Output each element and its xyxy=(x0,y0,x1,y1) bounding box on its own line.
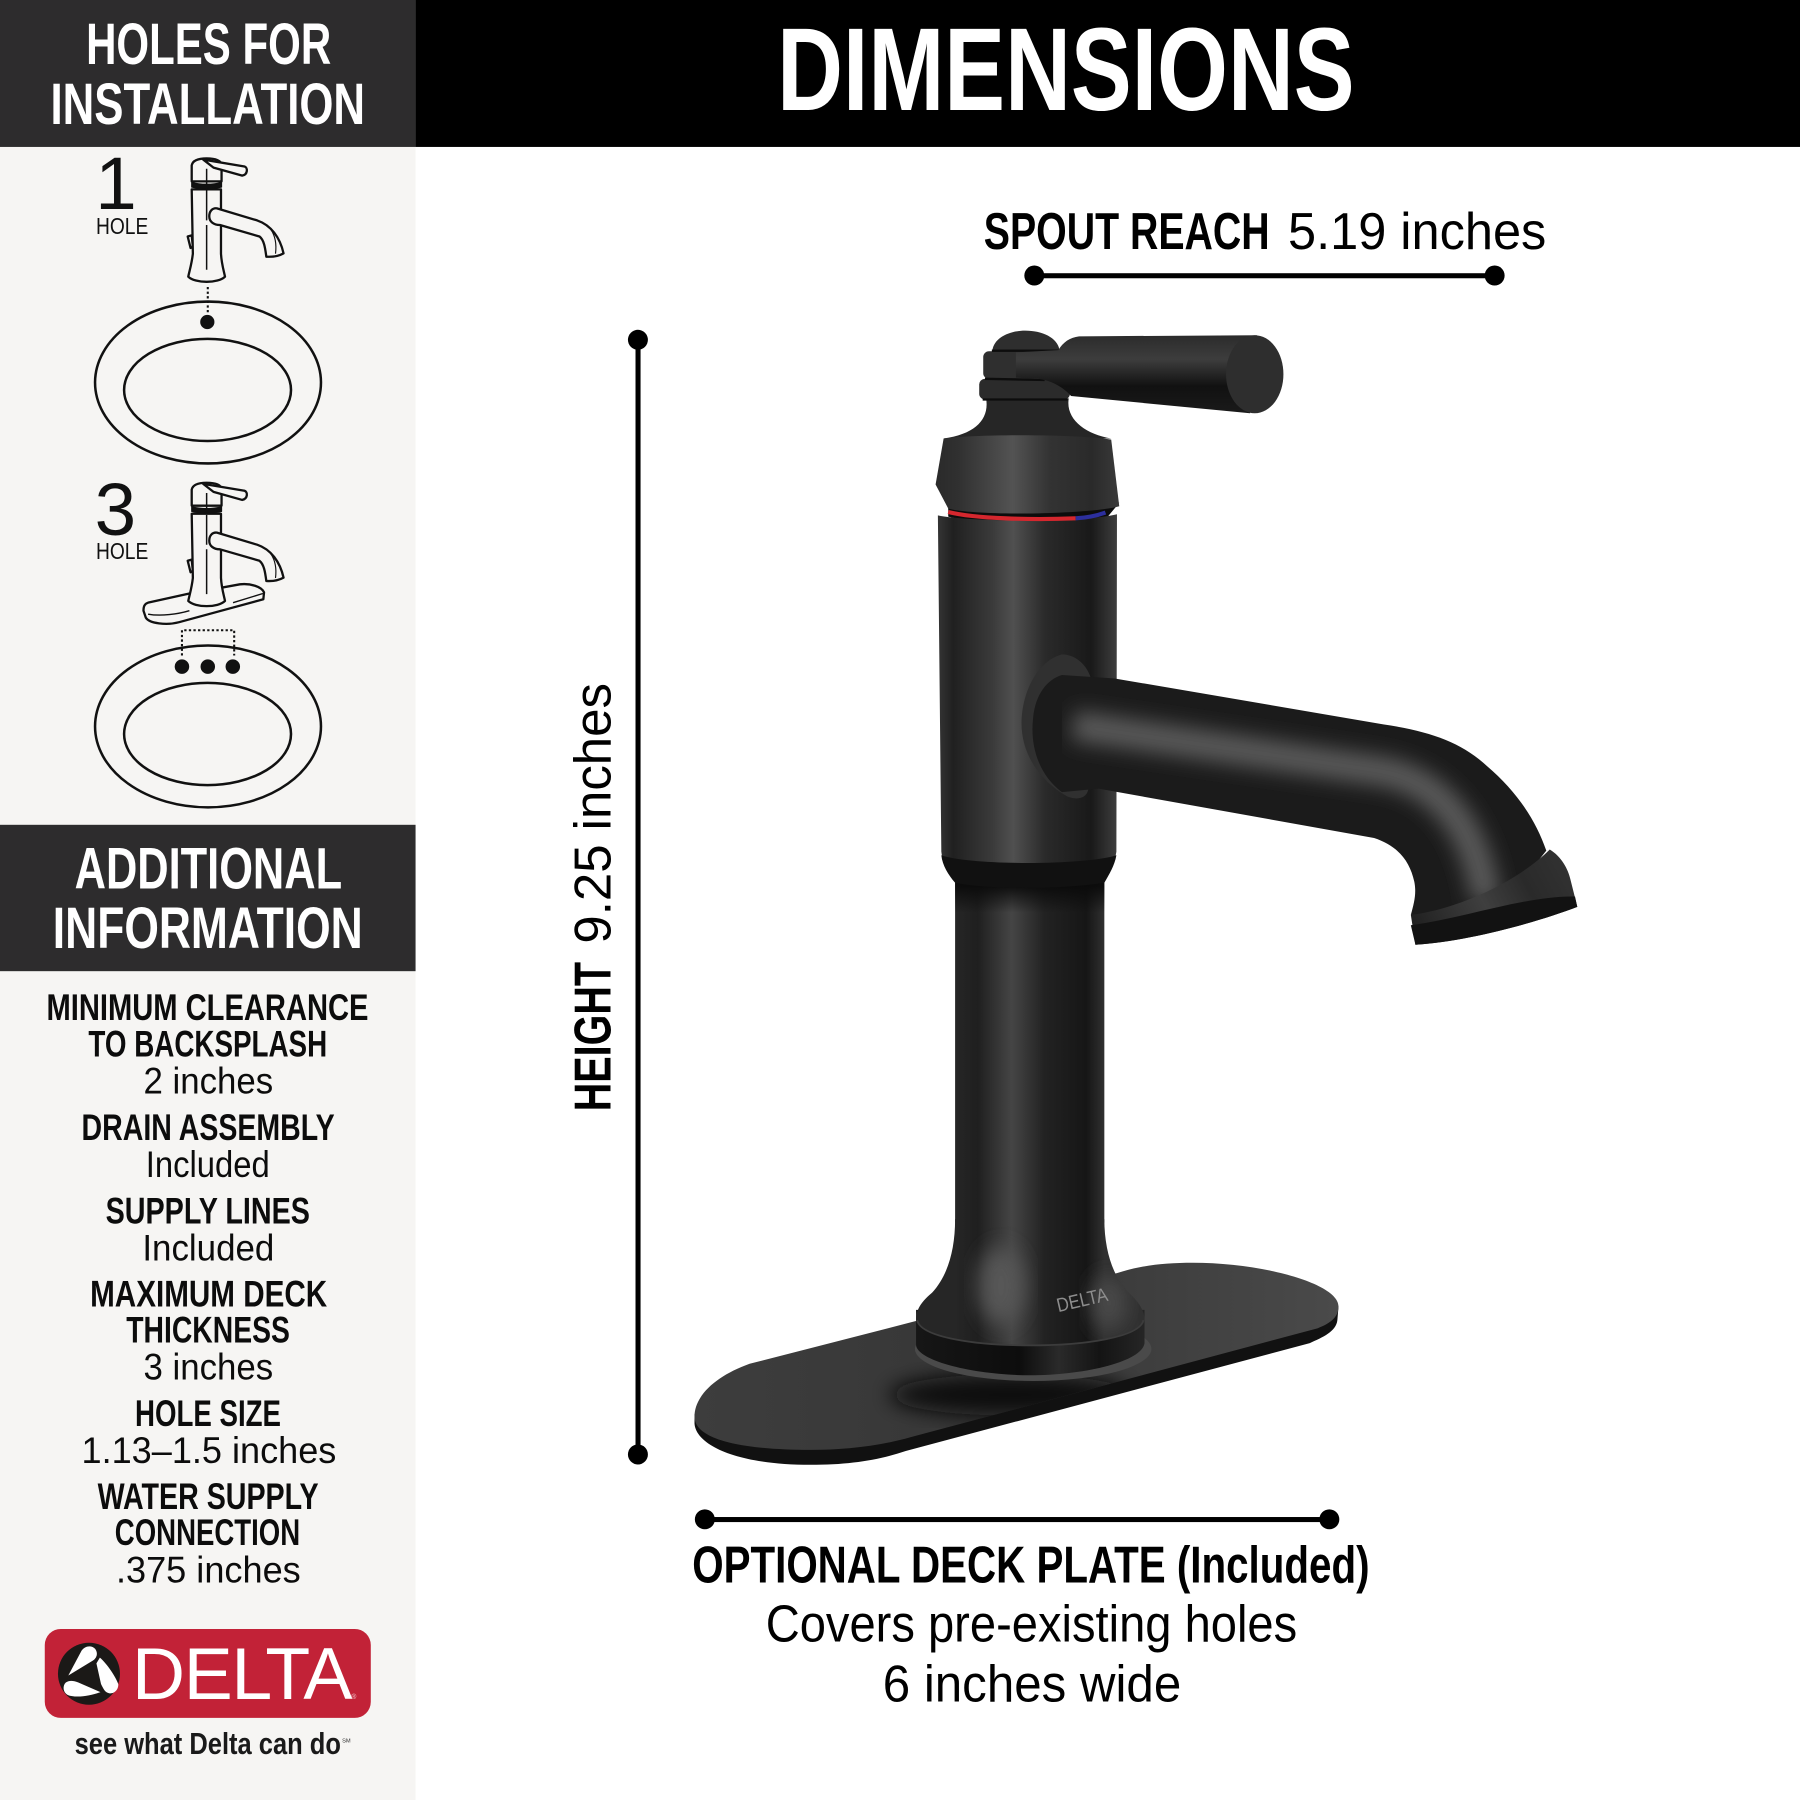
icon: delta emblem xyxy=(58,1643,120,1705)
callout: optional deck plate xyxy=(692,1509,1370,1712)
label: 3 hole: HOLE xyxy=(96,538,148,564)
icon: sink with three holes xyxy=(95,645,321,807)
logo: delta: ® xyxy=(351,1693,356,1701)
spec: supply lines xyxy=(106,1190,310,1268)
callout: optional deck plate: 6 inches wide xyxy=(883,1654,1181,1712)
spec: supply lines: Included xyxy=(142,1227,274,1268)
spec: water supply connection: .375 inches xyxy=(116,1549,301,1590)
heading: additional information xyxy=(0,825,416,971)
spout aerator xyxy=(1411,849,1577,945)
logo: delta: SM xyxy=(342,1739,351,1745)
label: 1 hole: 1 xyxy=(95,141,137,225)
deck plate xyxy=(695,1263,1339,1465)
handle dome xyxy=(992,331,1060,350)
logo: delta xyxy=(45,1629,371,1761)
callout: optional deck plate: Covers pre-existing holes xyxy=(766,1595,1297,1653)
spec: minimum clearance: TO BACKSPLASH xyxy=(88,1024,327,1065)
spec: water supply connection xyxy=(98,1476,319,1590)
icon: sink with one hole xyxy=(95,302,321,463)
callout: height: HEIGHT xyxy=(564,962,622,1111)
spec: drain assembly: DRAIN ASSEMBLY xyxy=(82,1107,335,1148)
spec: drain assembly: Included xyxy=(146,1144,270,1185)
handle collar lower xyxy=(979,379,1070,399)
dotted guide line xyxy=(207,287,209,313)
text block: specifications xyxy=(46,987,368,1590)
stripe backing xyxy=(948,503,1119,523)
callout: height xyxy=(564,330,648,1464)
spec: hole size xyxy=(82,1393,336,1471)
heading: holes for installation xyxy=(0,0,416,147)
spec: water supply connection: WATER SUPPLY xyxy=(98,1476,319,1517)
banner: dimensions xyxy=(416,0,1800,147)
spec: minimum clearance: 2 inches xyxy=(143,1060,273,1101)
spec: hole size: 1.13–1.5 inches xyxy=(82,1430,336,1471)
callout: spout reach: 5.19 inches xyxy=(1288,202,1546,260)
handle lever xyxy=(1016,335,1283,413)
spec: maximum deck thickness xyxy=(90,1273,328,1387)
handle collar upper xyxy=(983,351,1066,379)
heading: additional information: ADDITIONAL xyxy=(75,837,342,902)
spec: maximum deck thickness: THICKNESS xyxy=(126,1310,290,1351)
heading: holes for installation: HOLES FOR xyxy=(86,12,331,77)
engraved logo: DELTA xyxy=(1055,1284,1110,1317)
collar grooves xyxy=(983,351,1068,399)
illustration: black faucet xyxy=(695,331,1577,1465)
arrow: deck plate dimension line xyxy=(695,1509,1339,1529)
label: 3 hole: 3 xyxy=(95,467,136,551)
spout xyxy=(1032,675,1546,918)
spec: supply lines: SUPPLY LINES xyxy=(106,1190,310,1231)
label: 1 hole xyxy=(95,141,148,239)
arrow: spout reach dimension line xyxy=(1024,266,1505,285)
panel: one hole option xyxy=(95,141,321,463)
spec: maximum deck thickness: 3 inches xyxy=(143,1346,273,1387)
arrow: height dimension line xyxy=(628,330,648,1464)
panel: left sidebar xyxy=(0,0,416,1800)
callout: height: 9.25 inches xyxy=(564,683,622,944)
icon: faucet with deck plate xyxy=(143,483,284,624)
base flare xyxy=(916,1219,1145,1345)
title: dimensions: DIMENSIONS xyxy=(777,4,1355,136)
hot and cold stripe xyxy=(948,512,1105,519)
base foot xyxy=(916,1310,1145,1375)
dotted guide bracket xyxy=(182,630,234,655)
spout junction ring xyxy=(1022,654,1091,798)
lower column xyxy=(955,872,1104,1223)
heading: additional information: INFORMATION xyxy=(53,896,363,961)
handle base neck xyxy=(944,398,1111,439)
handle cap xyxy=(936,435,1119,514)
label: 3 hole xyxy=(95,467,148,564)
column collar shadow xyxy=(955,855,1104,913)
callout: optional deck plate: OPTIONAL DECK PLATE (Included) xyxy=(692,1535,1370,1593)
spec: maximum deck thickness: MAXIMUM DECK xyxy=(90,1273,328,1314)
tagline: see what Delta can do xyxy=(75,1726,341,1761)
base washer xyxy=(915,1317,1151,1381)
callout: spout reach xyxy=(984,202,1546,285)
upper body xyxy=(938,514,1117,887)
panel: three hole option xyxy=(95,467,321,807)
spec: minimum clearance xyxy=(46,987,368,1101)
heading: holes for installation: INSTALLATION xyxy=(51,72,365,137)
spec: minimum clearance: MINIMUM CLEARANCE xyxy=(46,987,368,1028)
body to column taper xyxy=(941,855,1116,888)
logo: delta: DELTA xyxy=(132,1632,352,1715)
spec: hole size: HOLE SIZE xyxy=(135,1393,281,1434)
callout: spout reach: SPOUT REACH xyxy=(984,202,1270,260)
spec: drain assembly xyxy=(82,1107,335,1185)
label: 1 hole: HOLE xyxy=(96,213,148,239)
spec: water supply connection: CONNECTION xyxy=(115,1512,300,1553)
icon: single hole faucet xyxy=(188,158,284,282)
